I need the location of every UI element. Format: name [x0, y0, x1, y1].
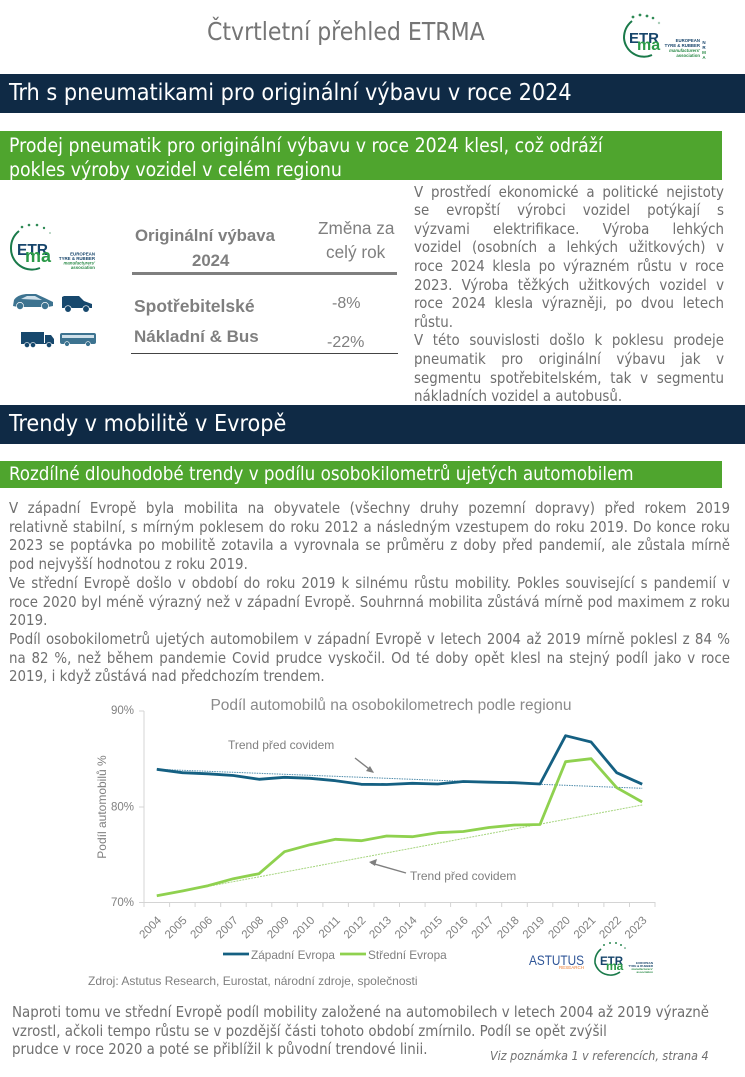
row value: truck and bus: -22%	[327, 334, 364, 351]
x axis labels: 2010	[291, 915, 317, 941]
row label: truck and bus: Nákladní & Bus	[134, 327, 259, 346]
logo: ETRMA top right: TYRE & RUBBER	[665, 43, 701, 48]
x axis labels: 2017	[470, 915, 496, 941]
source note: Zdroj: Astutus Research, Eurostat, národní zdroje, společnosti	[88, 974, 418, 988]
table header: full-year change: Změna za	[318, 218, 394, 238]
logo: ETRMA top right: ETR	[629, 30, 659, 47]
text block: market commentary: segmentu spotřebitelském, tak v segmentu	[414, 368, 724, 386]
y axis title: Podíl automobilů %	[95, 755, 109, 859]
logo: ETRMA chart: manufacturers'	[631, 967, 653, 971]
text block: market commentary	[414, 182, 724, 405]
trend line: western Europe	[157, 769, 642, 788]
logo: ETRMA top right: manufacturers'	[669, 48, 701, 53]
annotation: central trend: Trend před covidem	[410, 869, 516, 883]
x axis labels: 2006	[189, 915, 215, 941]
chart title: Podíl automobilů na osobokilometrech podle regionu	[210, 697, 572, 714]
x axis labels: 2021	[572, 915, 598, 941]
logo: ETRMA chart: ETR	[600, 956, 624, 968]
text block: mobility commentary: 2019.	[9, 611, 47, 629]
subheading: tyre sales	[0, 131, 722, 180]
x axis labels: 2011	[317, 915, 343, 941]
heading: mobility trends	[0, 405, 745, 444]
logo: ETRMA top right: ma	[637, 37, 660, 54]
logo: ETRMA top right: M	[702, 50, 706, 55]
x axis labels: 2016	[444, 915, 471, 941]
text block: market commentary: V této souvislosti došlo k poklesu prodeje	[414, 331, 724, 349]
x axis labels	[138, 914, 650, 941]
logo: ETRMA chart	[595, 942, 654, 975]
y axis labels: 80%	[111, 802, 134, 814]
row label: consumer: Spotřebitelské	[134, 296, 255, 316]
text block: closing commentary: Naproti tomu ve střední Evropě podíl mobility založené na automobilech v letech 2004 až 2019 výrazně	[12, 1003, 709, 1021]
text block: mobility commentary: Podíl osobokilometrů ujetých automobilem v západní Evropě v letech 2004 až 2019 mírně poklesl z 84 %	[9, 630, 730, 648]
table header: year: 2024	[192, 251, 229, 270]
logo: ETRMA chart: association	[636, 970, 653, 974]
logo: ETRMA top right	[623, 14, 706, 60]
subheading: tyre sales: pokles výroby vozidel v celém regionu	[9, 158, 342, 181]
table rule	[132, 272, 397, 275]
y axis labels: 70%	[111, 897, 134, 909]
text block: mobility commentary: Ve střední Evropě došlo v období do roku 2019 k silnému růstu mobility. Pokles související s pandemií v	[9, 574, 730, 592]
annotation: western trend: Trend před covidem	[228, 738, 334, 752]
heading: market section	[0, 74, 745, 113]
chart: car share of passenger-kilometres by region	[88, 697, 656, 988]
text block: market commentary: roce 2024 klesla po výrazném růstu v roce	[414, 257, 724, 275]
text block: market commentary: pneumatik pro originální výbavu jak v	[414, 350, 724, 368]
legend: Západní Evropa	[251, 948, 335, 962]
logo: ETRMA left: ETR	[17, 242, 48, 259]
heading: market section: Trh s pneumatikami pro originální výbavu v roce 2024	[9, 79, 572, 106]
row value: consumer: -8%	[332, 295, 360, 312]
series: central Europe	[157, 759, 642, 896]
logo: ETRMA top right: A	[702, 55, 706, 60]
text block: market commentary: výzvami elektrifikace. Výroba lehkých	[414, 220, 724, 238]
x axis labels: 2022	[597, 915, 624, 941]
text block: mobility commentary: na 82 %, než během pandemie Covid prudce vyskočil. Od té doby opět klesl na stejný podíl jako v roce	[9, 649, 730, 667]
text block: mobility commentary	[9, 499, 730, 685]
text block: market commentary: vozidel (osobních a lehkých užitkových) v	[414, 238, 724, 256]
text block: closing commentary: prudce v roce 2020 a poté se přiblížil k původní trendové linii.	[12, 1040, 427, 1058]
x axis labels: 2018	[495, 915, 522, 941]
table header: full year: celý rok	[326, 242, 385, 262]
subheading: tyre sales: Prodej pneumatik pro originální výbavu v roce 2024 klesl, což odráží	[9, 134, 603, 157]
x axis labels: 2023	[623, 915, 650, 941]
y axis labels	[111, 705, 134, 909]
table: original equipment change	[131, 218, 398, 354]
text block: market commentary: 2023. Výroba těžkých užitkových vozidel v	[414, 276, 724, 294]
logo: ETRMA left: EUROPEAN	[70, 252, 95, 256]
logo: ETRMA chart: TYRE & RUBBER	[628, 964, 654, 968]
x axis labels: 2009	[265, 915, 292, 941]
logo: ETRMA left	[10, 224, 96, 271]
x axis labels: 2005	[163, 915, 190, 941]
title: Čtvrtletní přehled ETRMA	[207, 17, 485, 46]
trend line: central Europe	[157, 805, 642, 896]
subheading: long-term trends: Rozdílné dlouhodobé trendy v podílu osobokilometrů ujetých automobilem	[9, 464, 634, 485]
text block: mobility commentary: pod nejvyšší hodnotou z roku 2019.	[9, 555, 248, 573]
axes	[144, 711, 655, 902]
x axis labels: 2014	[393, 914, 420, 941]
annotation: western trend	[228, 738, 374, 773]
x axis labels: 2007	[214, 915, 241, 941]
x axis labels: 2012	[342, 915, 369, 941]
text block: market commentary: se evropští výrobci vozidel potýkají s	[414, 201, 724, 219]
text block: market commentary: V prostředí ekonomické a politické nejistoty	[414, 182, 724, 200]
logo: Astutus Research: ASTUTUS	[529, 953, 584, 968]
logo: Astutus Research: RESEARCH	[559, 965, 584, 970]
footnote reference: Viz poznámka 1 v referencích, strana 4	[490, 1048, 709, 1063]
logo: ETRMA left: ma	[25, 246, 52, 266]
legend: Střední Evropa	[368, 948, 447, 962]
text block: mobility commentary: roce 2020 byl méně výrazný než v západní Evropě. Souhrnná mobilita zůstává mírně pod maximem z roku	[9, 592, 730, 610]
subheading: long-term trends	[0, 461, 722, 488]
logo: ETRMA top right: N	[702, 40, 706, 45]
icons: truck and bus	[21, 332, 96, 348]
annotation: central trend	[369, 859, 516, 883]
text block: mobility commentary: relativně stabilní, s mírným poklesem do roku 2012 a následným vzestupem do roku 2019. Do konce roku	[9, 518, 730, 536]
series: western Europe	[157, 736, 642, 784]
table bottom rule	[131, 353, 398, 354]
text block: market commentary: růstu.	[414, 313, 453, 331]
x axis labels: 2008	[240, 915, 266, 941]
legend	[223, 948, 447, 962]
x axis labels: 2004	[138, 914, 165, 941]
text block: market commentary: roce 2024 klesla výrazněji, po dvou letech	[414, 294, 724, 312]
logo: ETRMA left: manufacturers'	[63, 260, 96, 266]
text block: mobility commentary: 2023 se poptávka po mobilitě zotavila a vyrovnala se průměru z doby před pandemií, ale zůstala mírně	[9, 536, 730, 554]
logo: ETRMA top right: association	[676, 53, 700, 58]
text block: mobility commentary: V západní Evropě byla mobilita na obyvatele (všechny druhy pozemní dopravy) před rokem 2019	[9, 499, 730, 517]
logo: ETRMA left: association	[71, 265, 95, 270]
logo: ETRMA chart: ma	[606, 959, 624, 973]
table header: original equipment: Originální výbava	[135, 226, 275, 245]
logo: ETRMA top right: R	[702, 45, 706, 50]
text block: mobility commentary: 2019, i když zůstává nad předchozím trendem.	[9, 667, 325, 685]
heading: mobility trends: Trendy v mobilitě v Evropě	[9, 410, 286, 437]
logo: ETRMA top right: EUROPEAN	[676, 38, 700, 43]
x axis labels: 2013	[367, 915, 394, 941]
y axis labels: 90%	[111, 705, 134, 717]
x axis labels: 2015	[419, 915, 445, 941]
text block: closing commentary: vzrostl, ačkoli tempo růstu se v pozdější části tohoto období zmírnilo. Podíl se opět zvýšil	[12, 1022, 607, 1040]
x axis labels: 2020	[546, 915, 573, 941]
icons: car and van	[13, 294, 92, 312]
x axis labels: 2019	[521, 915, 547, 941]
logo: ETRMA left: TYRE & RUBBER	[59, 256, 96, 261]
text block: market commentary: nákladních vozidel a autobusů.	[414, 387, 622, 405]
text block: closing commentary	[12, 1003, 709, 1058]
logo: ETRMA chart: EUROPEAN	[636, 961, 653, 965]
